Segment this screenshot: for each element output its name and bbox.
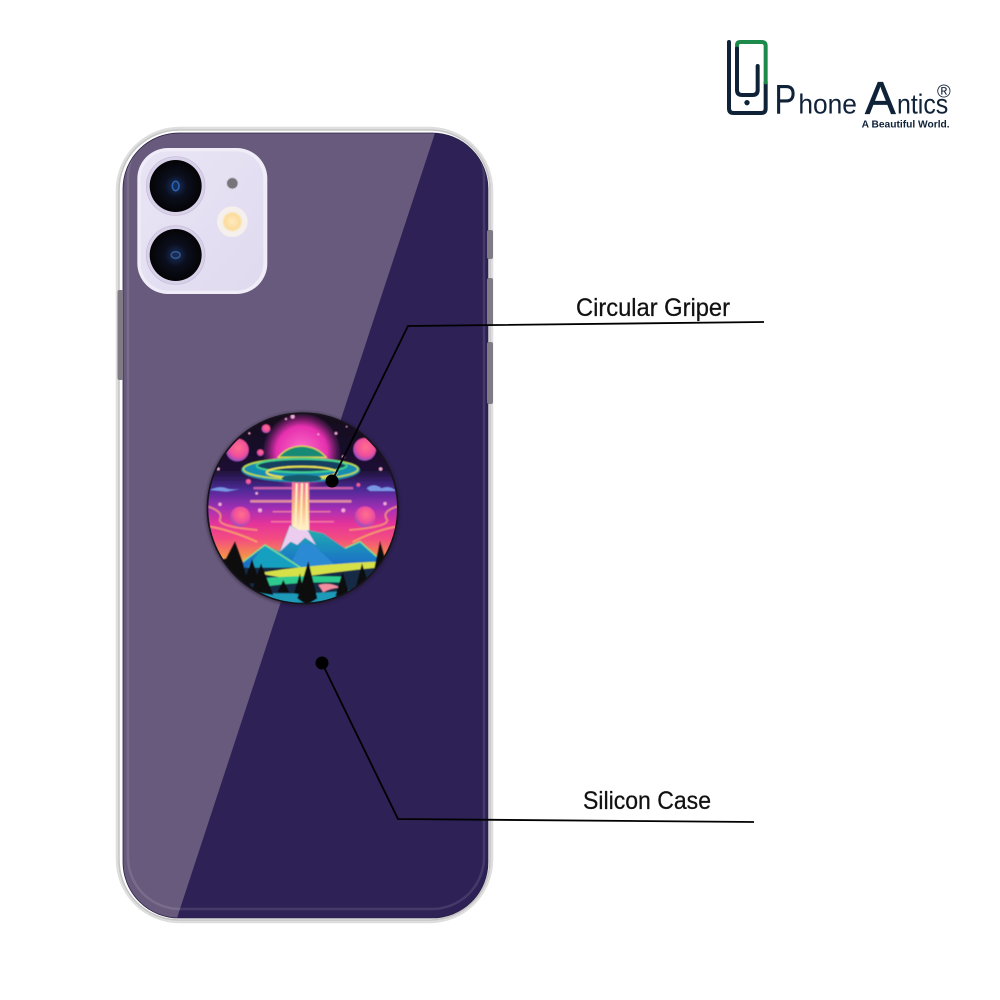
callout anchor dot bbox=[326, 474, 338, 488]
valley bbox=[243, 567, 376, 594]
sky bbox=[208, 414, 397, 564]
callout label: Circular Griper bbox=[576, 294, 730, 322]
logo wordmark: ® bbox=[937, 80, 951, 101]
callout: Circular Griper bbox=[326, 294, 764, 488]
UFO saucer bbox=[241, 458, 360, 482]
phone side buttons bbox=[118, 230, 493, 404]
callout label: Silicon Case bbox=[583, 787, 711, 815]
distant mountains bbox=[242, 524, 378, 569]
camera module bbox=[137, 148, 267, 294]
logo wordmark: ntics bbox=[897, 88, 948, 119]
logo phone icon bbox=[729, 42, 766, 113]
griper shadow bbox=[205, 412, 400, 606]
logo wordmark bbox=[774, 72, 951, 131]
logo wordmark: A Beautiful World. bbox=[862, 120, 950, 131]
halo bbox=[262, 412, 341, 491]
camera housing bbox=[137, 148, 267, 294]
UFO dome bbox=[278, 446, 326, 457]
phone case bbox=[118, 125, 492, 922]
light beam bbox=[292, 481, 309, 531]
mountain peak snow bbox=[280, 526, 316, 552]
pine trees bbox=[223, 540, 385, 603]
stars bbox=[217, 415, 387, 512]
bottom lens bbox=[146, 226, 205, 284]
logo wordmark: hone bbox=[798, 88, 857, 119]
logo wordmark: A bbox=[865, 72, 896, 123]
logo: Phone Antics bbox=[729, 42, 951, 131]
circular griper bbox=[205, 412, 400, 606]
case outer transparent rim bbox=[119, 130, 490, 920]
microphone bbox=[227, 178, 238, 189]
mountain ridge highlight bbox=[243, 542, 377, 568]
griper rim bbox=[207, 412, 399, 604]
flash bbox=[217, 206, 248, 237]
callout: Silicon Case bbox=[316, 656, 754, 822]
callout leader line bbox=[332, 322, 764, 481]
callout anchor dot bbox=[316, 656, 328, 670]
top lens bbox=[146, 157, 205, 215]
callout leader line bbox=[322, 663, 754, 822]
planets bbox=[226, 424, 376, 527]
case back panel bbox=[123, 125, 488, 918]
logo wordmark: P bbox=[774, 75, 796, 122]
case outer soft edge bbox=[118, 128, 492, 922]
horizontal glow bands bbox=[208, 485, 397, 542]
